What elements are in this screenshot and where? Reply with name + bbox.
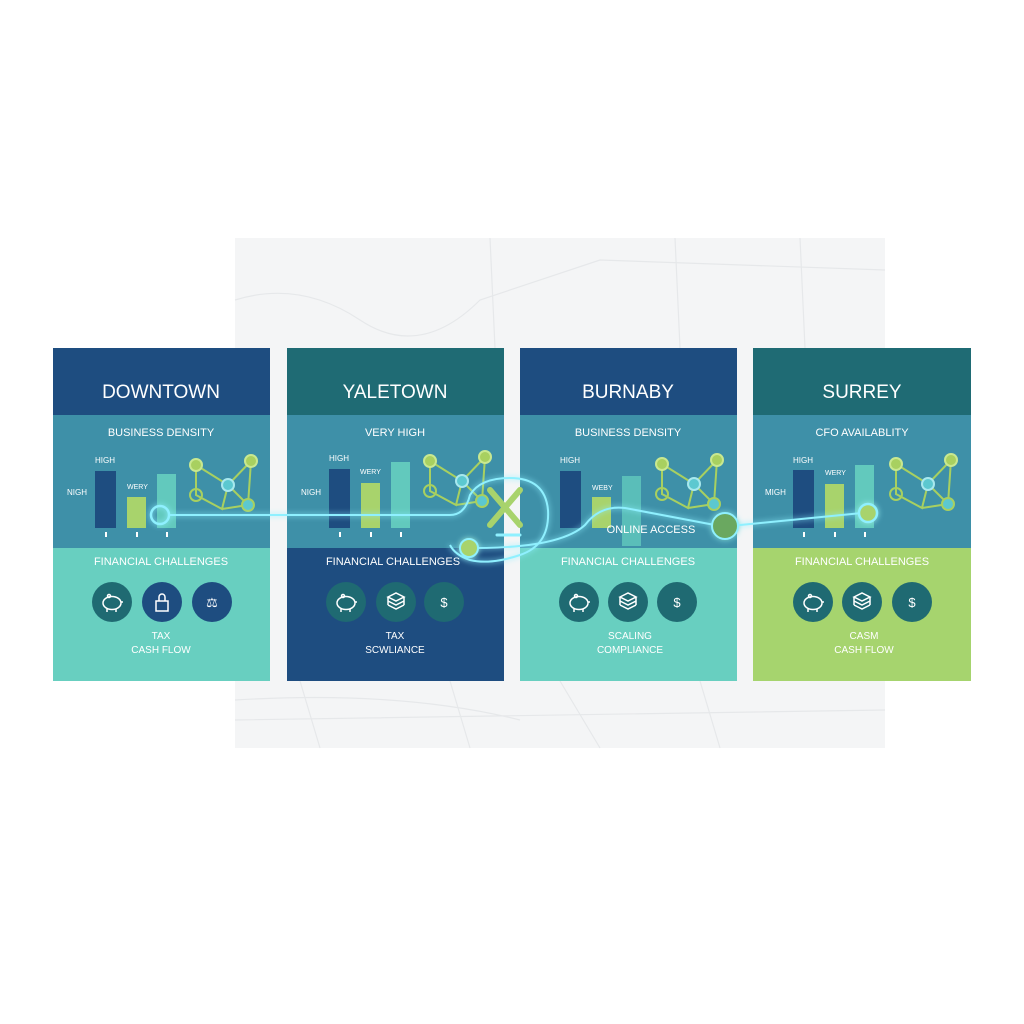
panel: burnaby: WEBY — [592, 485, 613, 492]
panel: yaletown: $ — [440, 595, 448, 610]
panel: downtown — [53, 348, 270, 681]
panel: burnaby — [520, 348, 737, 681]
panel: surrey: MIGH — [765, 488, 786, 497]
panel: downtown: WERY — [127, 484, 148, 491]
panel: yaletown: WERY — [360, 469, 381, 476]
panel: yaletown: FINANCIAL CHALLENGES — [326, 556, 460, 568]
panel: yaletown: VERY HIGH — [365, 427, 425, 439]
panel: surrey: HIGH — [793, 456, 813, 465]
panel: burnaby: $ — [673, 595, 681, 610]
panel: yaletown: HIGH — [329, 454, 349, 463]
panel: surrey: WERY — [825, 470, 846, 477]
panel: burnaby: HIGH — [560, 456, 580, 465]
panel: yaletown: SCWLIANCE — [365, 645, 425, 656]
panel: burnaby: FINANCIAL CHALLENGES — [561, 556, 695, 568]
panel: burnaby: COMPLIANCE — [597, 645, 663, 656]
glowing connector line — [151, 478, 877, 562]
panel: downtown: TAX — [152, 631, 171, 642]
panel: downtown: BUSINESS DENSITY — [108, 427, 215, 439]
panel: burnaby: SCALING — [608, 631, 652, 642]
panel: surrey: CASM — [850, 631, 878, 642]
panel: yaletown: NIGH — [301, 488, 321, 497]
panel: yaletown: TAX — [386, 631, 405, 642]
panel: downtown: DOWNTOWN — [102, 382, 220, 403]
background map — [235, 238, 885, 748]
panel: surrey: $ — [908, 595, 916, 610]
icon: tools — [490, 490, 520, 535]
panel: yaletown — [287, 348, 504, 681]
panel: downtown: FINANCIAL CHALLENGES — [94, 556, 228, 568]
panel: surrey: FINANCIAL CHALLENGES — [795, 556, 929, 568]
panel: surrey: CFO AVAILABLITY — [815, 427, 909, 439]
panel: downtown: NIGH — [67, 488, 87, 497]
panel: surrey — [753, 348, 971, 681]
panel: surrey: CASH FLOW — [834, 645, 894, 656]
panel: burnaby: BUSINESS DENSITY — [575, 427, 682, 439]
panel: burnaby: BURNABY — [582, 382, 674, 403]
panel: downtown: ⚖ — [206, 595, 218, 610]
panel: yaletown: YALETOWN — [343, 382, 447, 403]
panel: surrey: SURREY — [822, 382, 902, 403]
panel: downtown: HIGH — [95, 456, 115, 465]
panel: burnaby: ONLINE ACCESS — [607, 524, 695, 536]
panel: downtown: CASH FLOW — [131, 645, 191, 656]
